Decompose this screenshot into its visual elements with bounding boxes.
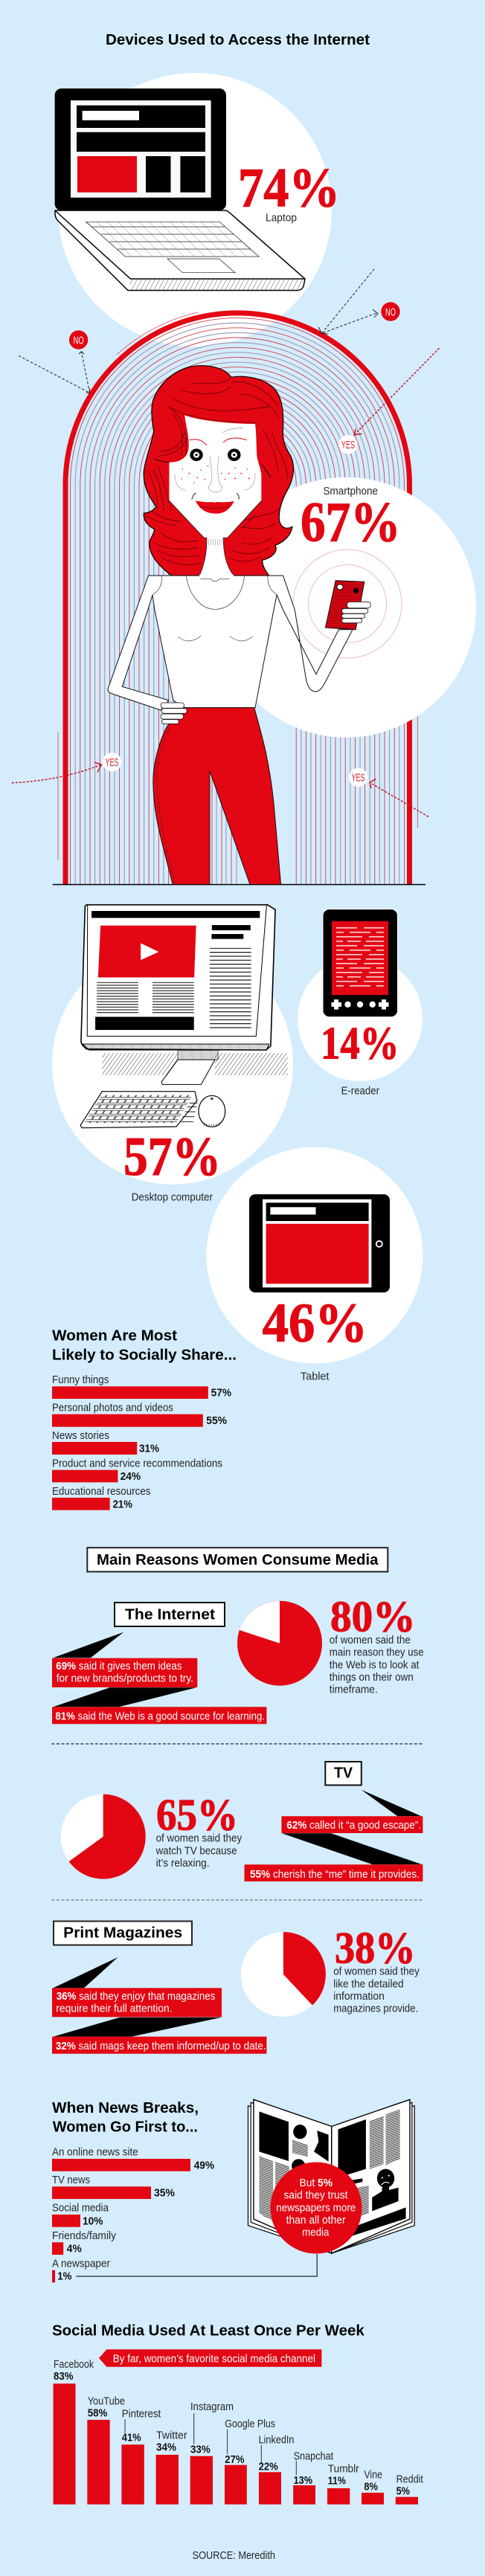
panel: the internet <box>52 1591 424 1724</box>
bar chart: news: A newspaper <box>52 2258 110 2270</box>
bar chart: news: Friends/family <box>52 2229 116 2242</box>
bar chart: news: 10% <box>83 2215 103 2227</box>
panel: smartphone circle <box>216 477 476 738</box>
callout 36%: require their full attention. <box>56 2003 173 2015</box>
callout 81% <box>52 1707 266 1724</box>
right hand <box>341 602 370 623</box>
grey rings <box>75 323 399 884</box>
section label <box>54 1922 192 1945</box>
callout: 5% circle: said they trust <box>284 2189 348 2202</box>
callout 55%: 55% cherish the “me” time it provides. <box>250 1868 420 1881</box>
callout 81%: 81% said the Web is a good source for learning. <box>55 1710 265 1722</box>
bar chart: socially share: Funny things <box>52 1374 109 1386</box>
labels: Twitter <box>156 2429 187 2441</box>
bar chart: news: 4% <box>67 2243 82 2255</box>
bar chart: news: An online news site <box>52 2146 138 2159</box>
illustration: woman <box>108 366 370 884</box>
icon: laptop <box>55 88 305 290</box>
labels: Facebook <box>54 2358 94 2371</box>
paragraph: the Web is to look at <box>330 1658 420 1671</box>
labels: 27% <box>225 2453 244 2466</box>
callout 55% <box>244 1864 423 1881</box>
hair <box>144 366 293 576</box>
bar chart: socially share <box>52 1374 231 1510</box>
labels <box>54 2358 423 2497</box>
labels: 34% <box>156 2441 176 2453</box>
icon: desktop <box>80 905 288 1128</box>
heading: social media: Social Media Used At Least Once Per Week <box>52 2322 364 2340</box>
callout 32% <box>52 2037 266 2054</box>
desktop label: Desktop computer <box>132 1191 213 1203</box>
labels: 33% <box>190 2444 211 2456</box>
bar chart: social media <box>54 2358 423 2505</box>
black ribbon <box>362 1790 421 1816</box>
badge: yes right: YES <box>351 772 364 785</box>
labels: 5% <box>396 2485 410 2497</box>
callout 69% <box>52 1658 197 1687</box>
callout banner <box>99 2349 321 2367</box>
section label: The Internet <box>125 1606 215 1623</box>
labels: LinkedIn <box>259 2434 294 2447</box>
bar chart: socially share: Personal photos and videos <box>52 1401 173 1414</box>
bar chart: news: Social media <box>52 2202 109 2215</box>
arrows and badges <box>12 269 439 817</box>
panel: laptop <box>55 73 340 347</box>
outer thin verticals <box>58 716 417 860</box>
labels: 83% <box>54 2370 73 2383</box>
heading: socially share: Likely to Socially Share... <box>52 1346 237 1363</box>
labels: Reddit <box>396 2473 423 2486</box>
callout: 5% circle: than all other <box>286 2214 346 2226</box>
e-reader circle <box>298 956 423 1081</box>
connector line <box>76 2254 317 2276</box>
desktop circle <box>52 944 293 1185</box>
callout 36% <box>52 1988 222 2017</box>
section label <box>325 1762 362 1785</box>
pie 80% <box>237 1601 322 1686</box>
icon: tablet <box>249 1194 390 1292</box>
bar chart: socially share: 24% <box>121 1470 141 1483</box>
paragraph: information <box>333 1990 385 2003</box>
paragraph <box>333 1965 420 2015</box>
paragraph <box>155 1832 242 1870</box>
leader lines <box>125 2413 296 2475</box>
outer thin arc <box>117 312 198 355</box>
callout 32%: 32% said mags keep them informed/up to date. <box>56 2040 266 2052</box>
section label: TV <box>334 1765 353 1782</box>
labels: 11% <box>328 2474 346 2487</box>
signal rings <box>293 550 402 658</box>
bar chart: socially share: 31% <box>139 1443 159 1455</box>
labels: YouTube <box>88 2395 125 2408</box>
icon: e-reader <box>323 909 398 1017</box>
tablet label: Tablet <box>301 1371 330 1383</box>
panel: e-reader <box>298 909 423 1098</box>
callout 62%: 62% called it “a good escape”. <box>286 1819 421 1832</box>
74%: 74% <box>238 158 340 219</box>
heading: socially share: Women Are Most <box>52 1327 177 1345</box>
paragraph: magazines provide. <box>333 2003 418 2015</box>
panel: print magazines <box>52 1922 420 2054</box>
title: Devices Used to Access the Internet <box>106 31 370 48</box>
arrow: yes left <box>12 762 101 783</box>
badge: no left <box>69 330 88 350</box>
labels: Snapchat <box>294 2450 334 2462</box>
14%: 14% <box>321 1018 399 1069</box>
bar chart: news: TV news <box>52 2174 90 2186</box>
bar chart: socially share: News stories <box>52 1429 109 1442</box>
panel: tablet <box>207 1147 423 1383</box>
46%: 46% <box>263 1292 367 1354</box>
38%: 38% <box>335 1923 415 1972</box>
labels: 13% <box>294 2474 312 2487</box>
labels: Vine <box>364 2469 382 2482</box>
black ribbon <box>54 1632 123 1658</box>
badge: no right: NO <box>385 306 396 318</box>
icon: open magazine <box>248 2099 414 2253</box>
callout 62% <box>281 1816 423 1833</box>
panel: desktop computer <box>52 905 293 1203</box>
callout: 5% circle <box>271 2163 362 2253</box>
callout 69%: 69% said it gives them ideas <box>56 1660 182 1672</box>
badge: no right <box>381 302 400 321</box>
badge: yes right <box>349 768 367 787</box>
nose and cheeks <box>175 456 255 492</box>
paragraph: like the detailed <box>333 1977 404 1990</box>
tablet circle <box>207 1147 423 1364</box>
paragraph: timeframe. <box>330 1684 378 1696</box>
left hand <box>161 703 187 724</box>
paragraph: it’s relaxing. <box>156 1857 210 1870</box>
mouth <box>196 500 234 514</box>
80%: 80% <box>330 1591 415 1640</box>
bar chart: news <box>52 2146 214 2282</box>
callout 36%: 36% said they enjoy that magazines <box>57 1990 215 2003</box>
pie 65% <box>61 1794 146 1879</box>
bar chart: socially share: 57% <box>211 1387 231 1400</box>
67%: 67% <box>301 492 400 554</box>
bar chart: news: 35% <box>154 2187 175 2200</box>
65%: 65% <box>156 1791 238 1840</box>
section label <box>115 1603 225 1626</box>
bar chart: socially share: 55% <box>206 1414 227 1427</box>
bar chart: socially share: 21% <box>113 1498 132 1510</box>
pants <box>153 708 281 884</box>
laptop label: Laptop <box>266 212 297 225</box>
ground line <box>53 883 425 885</box>
arrow: yes right <box>370 779 428 817</box>
callout: 5% circle: newspapers more <box>276 2201 356 2214</box>
bar chart: socially share: Product and service recommendations <box>52 1457 222 1469</box>
red rings <box>71 318 404 884</box>
smartphone label: Smartphone <box>323 485 378 498</box>
pie 38% <box>241 1932 326 2017</box>
eyes <box>190 448 241 461</box>
heading box: main reasons <box>87 1548 388 1572</box>
bar chart: socially share: Educational resources <box>52 1485 150 1498</box>
paragraph <box>330 1634 424 1696</box>
black ribbon <box>54 1687 196 1707</box>
paragraph: things on their own <box>330 1671 414 1684</box>
black ribbon <box>282 1833 423 1864</box>
labels: Tumblr <box>328 2462 359 2475</box>
labels: 8% <box>364 2481 378 2493</box>
paragraph: of women said the <box>330 1634 411 1646</box>
freckles <box>181 466 250 483</box>
arrow: no right <box>318 269 378 334</box>
callout: 5% circle: But 5% <box>299 2177 333 2189</box>
eyebrows <box>189 438 247 445</box>
labels: Pinterest <box>122 2407 161 2420</box>
callout banner: By far, women’s favorite social media channel <box>113 2353 315 2366</box>
callout: 5% circle: media <box>302 2226 330 2239</box>
bar chart: news: 49% <box>194 2159 214 2171</box>
thick red arch <box>65 313 409 884</box>
heading: socially share <box>52 1327 237 1363</box>
section label: Print Magazines <box>63 1925 182 1942</box>
badge: yes left: YES <box>106 756 119 769</box>
badge: yes left <box>103 753 121 771</box>
paragraph: of women said they <box>156 1832 242 1845</box>
source: SOURCE: Meredith <box>193 2549 275 2562</box>
heading: when news breaks: When News Breaks, <box>52 2099 199 2116</box>
badge: yes top: YES <box>341 439 355 451</box>
heading box: main reasons: Main Reasons Women Consume Media <box>97 1551 379 1568</box>
heading: when news breaks <box>52 2099 199 2136</box>
heading: when news breaks: Women Go First to... <box>53 2119 198 2136</box>
labels: Instagram <box>190 2400 234 2413</box>
badge: yes top <box>338 435 358 454</box>
e-reader label: E-reader <box>341 1085 379 1098</box>
arrow: yes top <box>354 348 439 435</box>
bars <box>54 2383 418 2505</box>
labels: 58% <box>88 2407 107 2420</box>
paragraph: watch TV because <box>155 1844 237 1857</box>
paragraph: main reason they use <box>330 1646 424 1659</box>
face <box>154 415 271 538</box>
paragraph: of women said they <box>333 1965 420 1978</box>
panel: arch rings <box>53 312 425 885</box>
labels: Google Plus <box>225 2418 275 2430</box>
panel: tv <box>61 1762 423 1881</box>
arrow: no left <box>19 352 90 393</box>
phone <box>325 581 364 630</box>
black ribbon <box>54 1957 118 1988</box>
badge: no left: NO <box>74 335 84 347</box>
bar chart: news: 1% <box>57 2270 71 2282</box>
torso and arms <box>108 576 353 710</box>
callout 69%: for new brands/products to try. <box>57 1672 193 1685</box>
laptop background circle <box>58 73 332 347</box>
labels: 22% <box>259 2461 278 2473</box>
labels: 41% <box>122 2431 141 2444</box>
57%: 57% <box>123 1127 221 1188</box>
black ribbon <box>54 2018 222 2037</box>
neck <box>199 538 234 576</box>
